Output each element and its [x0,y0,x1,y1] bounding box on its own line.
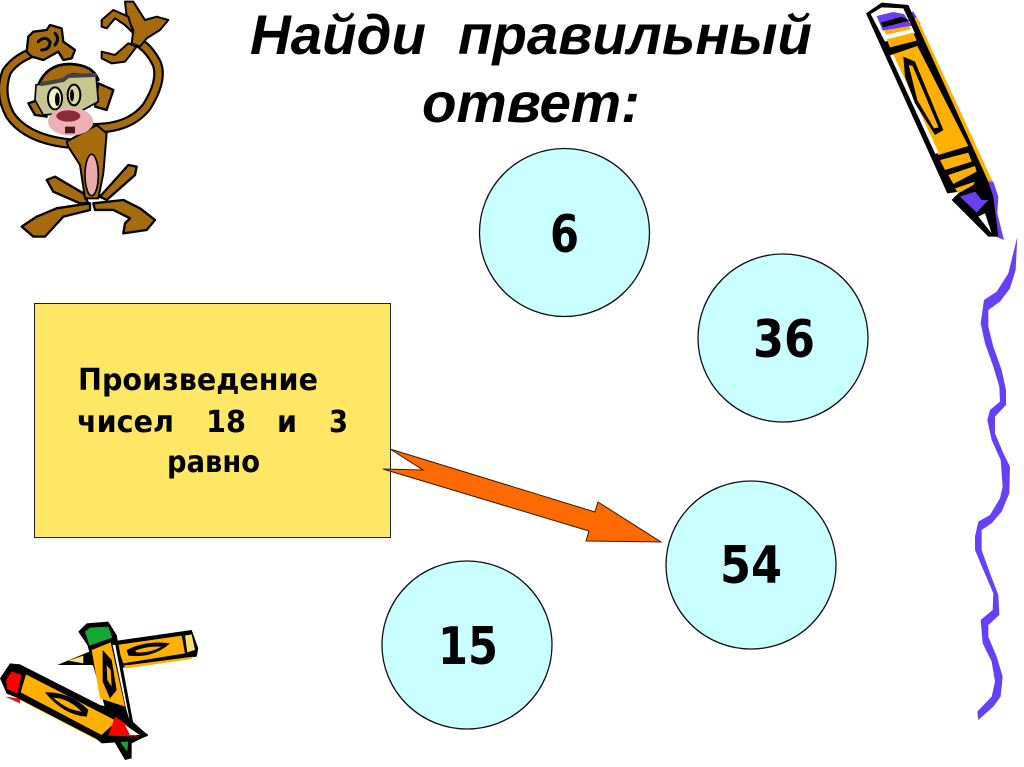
question text: 3 [329,405,348,440]
answer circle: 36 [698,254,868,422]
answer circle: 15 [382,561,552,729]
title: правильный [458,3,812,66]
icon: pencil pointing left [57,630,198,668]
question text: и [277,405,297,440]
icon: crossed pencils [0,622,198,760]
question text: Произведение [78,363,318,398]
answer circle: 6 [480,148,650,316]
question text: чисел [77,405,174,440]
answer circle: 54: 54 [720,536,782,596]
question text [77,363,348,480]
title: Найди [250,3,426,66]
panel: question box [34,304,390,538]
question text: равно [167,445,260,480]
answer circle: 15: 15 [438,617,498,677]
icon: monkey [3,2,168,237]
answer circle: 54 [666,481,836,649]
icon: pencil pointing right [0,663,148,743]
icon: large pencil [866,3,1004,240]
icon: purple squiggle [975,237,1017,720]
answer circle: 36: 36 [753,310,815,370]
arrow [383,449,661,542]
answer circle: 6: 6 [550,205,579,265]
question text: 18 [206,405,246,440]
title: ответ: [422,71,640,134]
title [250,3,812,134]
icon: pencil pointing down [78,622,148,760]
